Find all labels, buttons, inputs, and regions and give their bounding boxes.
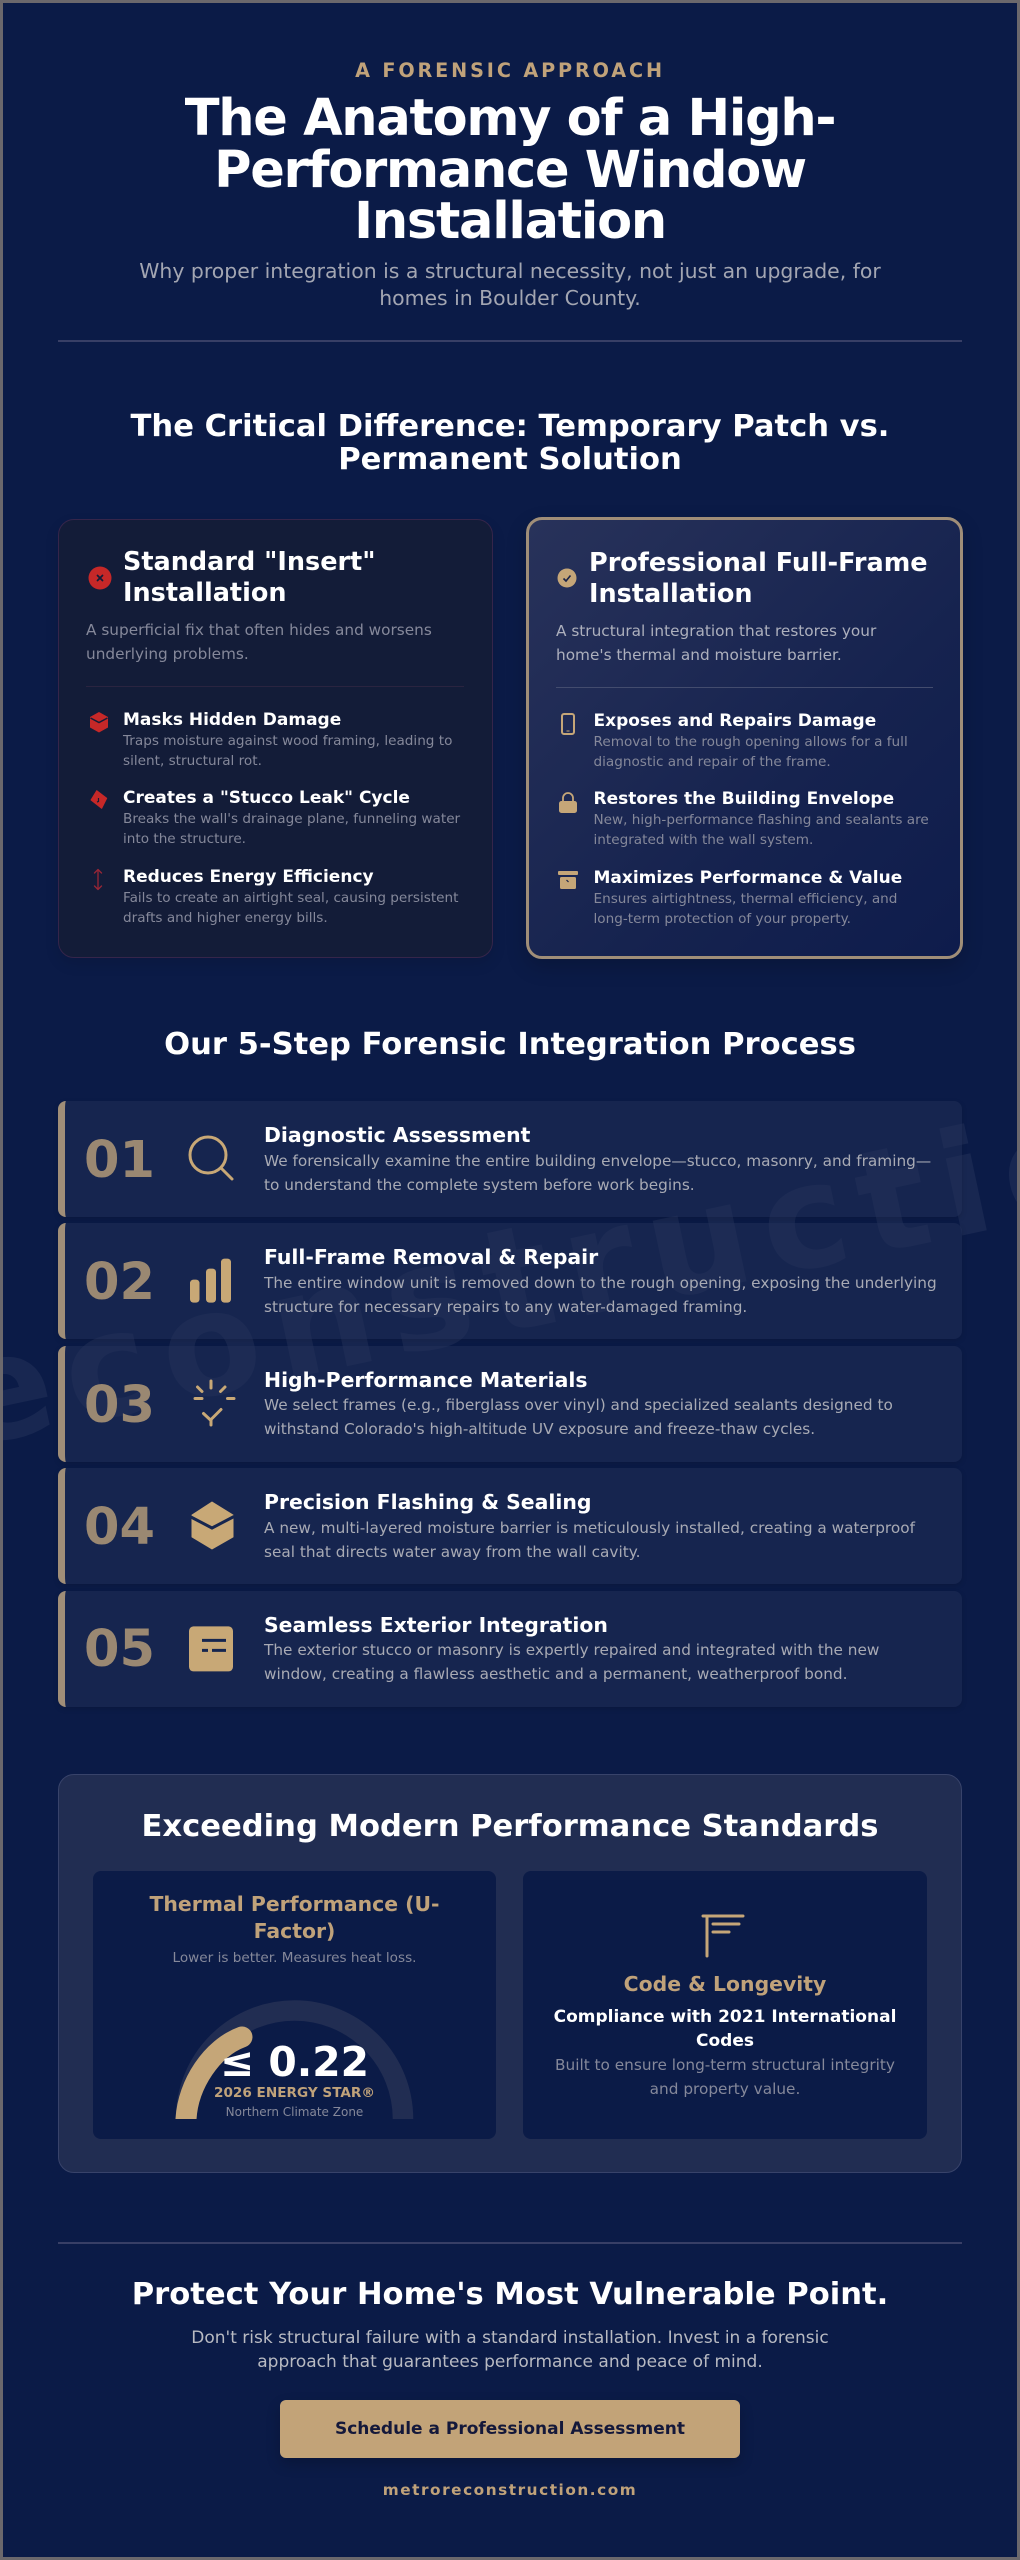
website: metroreconstruction.com xyxy=(383,2481,637,2499)
step description: seal that directs water away from the wall cavity. xyxy=(264,1543,640,1561)
icon: magnifier xyxy=(188,1136,234,1181)
step description xyxy=(264,1641,879,1683)
card description xyxy=(556,622,876,664)
icon: document lines xyxy=(702,1914,744,1958)
icon: gold check circle xyxy=(558,568,576,588)
panel: standard insert installation xyxy=(58,519,493,958)
footer text: approach that guarantees performance and peace of mind. xyxy=(257,2352,763,2372)
card title: Professional Full-Frame xyxy=(589,548,928,578)
subtitle: homes in Boulder County. xyxy=(379,286,641,310)
thermal title: Thermal Performance (U- xyxy=(149,1892,440,1916)
icon: red x circle xyxy=(88,566,112,590)
step 2 xyxy=(58,1223,962,1339)
code description xyxy=(555,2056,895,2098)
icon: box xyxy=(192,1502,234,1550)
item title: Exposes and Repairs Damage xyxy=(594,711,876,731)
thermal note: Lower is better. Measures heat loss. xyxy=(173,1950,416,1966)
panel heading: Exceeding Modern Performance Standards xyxy=(142,1808,878,1844)
step 3 xyxy=(58,1346,962,1462)
footer text: Don't risk structural failure with a standard installation. Invest in a forensic xyxy=(191,2328,829,2348)
card description: A structural integration that restores your xyxy=(556,622,876,640)
step title: High-Performance Materials xyxy=(264,1368,588,1392)
panel: performance standards xyxy=(58,1774,962,2173)
step number: 01 xyxy=(84,1131,155,1190)
item description xyxy=(594,734,908,770)
step title: Seamless Exterior Integration xyxy=(264,1613,608,1637)
step description: The entire window unit is removed down to the rough opening, exposing the underlying xyxy=(264,1274,937,1292)
icon: box xyxy=(90,712,108,732)
item description: into the structure. xyxy=(123,831,246,847)
step description xyxy=(264,1274,937,1316)
step 1 xyxy=(58,1101,962,1217)
item title: Maximizes Performance & Value xyxy=(594,868,902,888)
step number: 05 xyxy=(84,1620,155,1679)
item title: Reduces Energy Efficiency xyxy=(123,867,374,887)
footer text xyxy=(191,2328,829,2372)
sub-panel: code and longevity xyxy=(523,1871,927,2139)
step description: The exterior stucco or masonry is expertly repaired and integrated with the new xyxy=(264,1641,879,1659)
icon: tag xyxy=(90,790,108,809)
item description: New, high-performance flashing and sealants are xyxy=(594,812,929,828)
title: Performance Window xyxy=(214,140,806,200)
step description: window, creating a flawless aesthetic and a permanent, weatherproof bond. xyxy=(264,1665,848,1683)
item description: long-term protection of your property. xyxy=(594,911,851,927)
sub-panel: thermal performance xyxy=(93,1871,496,2139)
header xyxy=(58,59,962,342)
gauge xyxy=(176,2000,414,2119)
heading: critical difference: Permanent Solution xyxy=(338,442,682,477)
step description: We select frames (e.g., fiberglass over vinyl) and specialized sealants designed to xyxy=(264,1396,893,1414)
step description: A new, multi-layered moisture barrier is meticulously installed, creating a waterproof xyxy=(264,1519,915,1537)
step 4 xyxy=(58,1468,962,1584)
code statement: Codes xyxy=(696,2031,754,2051)
heading: critical difference xyxy=(130,409,889,477)
code description: and property value. xyxy=(650,2080,800,2098)
title xyxy=(185,89,835,251)
item description: Removal to the rough opening allows for a full xyxy=(594,734,908,750)
step number: 02 xyxy=(84,1253,155,1312)
item description xyxy=(123,890,458,926)
step description xyxy=(264,1152,931,1194)
footer heading: Protect Your Home's Most Vulnerable Point. xyxy=(132,2276,888,2312)
step description xyxy=(264,1519,916,1561)
item description: Ensures airtightness, thermal efficiency, and xyxy=(594,891,897,907)
icon: document panel xyxy=(189,1626,233,1672)
card title: Standard "Insert" xyxy=(123,547,376,577)
panel: professional full-frame installation xyxy=(526,517,963,959)
item description: diagnostic and repair of the frame. xyxy=(594,754,831,770)
icon: lock xyxy=(559,792,577,813)
title: The Anatomy of a High- xyxy=(185,89,835,148)
item title: Restores the Building Envelope xyxy=(594,789,894,809)
card divider xyxy=(556,687,933,688)
eyebrow: A FORENSIC APPROACH xyxy=(355,59,665,82)
item description: drafts and higher energy bills. xyxy=(123,910,328,926)
card title xyxy=(589,548,928,609)
step description xyxy=(264,1396,893,1438)
step description: withstand Colorado's high-altitude UV exposure and freeze-thaw cycles. xyxy=(264,1420,815,1438)
header divider xyxy=(58,340,962,342)
item description xyxy=(594,891,897,927)
gauge sublabel: Northern Climate Zone xyxy=(226,2105,363,2119)
card description: A superficial fix that often hides and worsens xyxy=(86,621,432,639)
code statement: Compliance with 2021 International xyxy=(554,2007,896,2027)
button: Schedule a Professional Assessment xyxy=(335,2419,685,2439)
item description: Traps moisture against wood framing, leading to xyxy=(123,733,452,749)
footer divider xyxy=(58,2242,962,2244)
card title: Installation xyxy=(589,579,753,609)
icon: phone xyxy=(561,713,575,735)
card divider xyxy=(86,686,464,687)
step title: Diagnostic Assessment xyxy=(264,1123,530,1147)
code title: Code & Longevity xyxy=(624,1972,826,1996)
item description: Fails to create an airtight seal, causing persistent xyxy=(123,890,458,906)
card description xyxy=(86,621,432,663)
step description: to understand the complete system before work begins. xyxy=(264,1176,695,1194)
item description: silent, structural rot. xyxy=(123,753,262,769)
item description xyxy=(594,812,929,848)
card description: underlying problems. xyxy=(86,645,249,663)
button xyxy=(280,2400,740,2458)
step 5 xyxy=(58,1591,962,1707)
item title: Creates a "Stucco Leak" Cycle xyxy=(123,788,410,808)
icon: sparkle xyxy=(194,1380,236,1426)
gauge label: 2026 ENERGY STAR® xyxy=(214,2084,375,2100)
step description: We forensically examine the entire building envelope—stucco, masonry, and framing— xyxy=(264,1152,931,1170)
step number: 03 xyxy=(84,1376,155,1435)
footer xyxy=(58,2242,962,2499)
item description xyxy=(123,811,460,847)
code statement xyxy=(554,2007,896,2051)
heading: critical difference: The Critical Difference: Temporary Patch vs. xyxy=(131,409,889,444)
icon: up-down arrow xyxy=(94,868,102,890)
heading: process: Our 5-Step Forensic Integration Process xyxy=(164,1026,856,1062)
item description: integrated with the wall system. xyxy=(594,832,813,848)
step title: Full-Frame Removal & Repair xyxy=(264,1245,598,1269)
icon: archive box xyxy=(558,871,578,889)
step description: structure for necessary repairs to any water-damaged framing. xyxy=(264,1298,747,1316)
step number: 04 xyxy=(84,1498,155,1557)
thermal title: Factor) xyxy=(254,1919,335,1943)
subtitle xyxy=(139,258,881,310)
icon: bar chart xyxy=(190,1258,231,1303)
code description: Built to ensure long-term structural integrity xyxy=(555,2056,895,2074)
item description xyxy=(122,733,452,769)
card title: Installation xyxy=(123,578,287,608)
item description: Breaks the wall's drainage plane, funneling water xyxy=(123,811,460,827)
gauge value: ≤ 0.22 xyxy=(220,2038,369,2086)
step title: Precision Flashing & Sealing xyxy=(264,1490,591,1514)
subtitle: Why proper integration is a structural necessity, not just an upgrade, for xyxy=(139,258,881,282)
card title xyxy=(123,547,376,608)
thermal title xyxy=(149,1892,440,1943)
card description: home's thermal and moisture barrier. xyxy=(556,646,842,664)
title: Installation xyxy=(354,192,666,251)
item title: Masks Hidden Damage xyxy=(123,710,341,730)
